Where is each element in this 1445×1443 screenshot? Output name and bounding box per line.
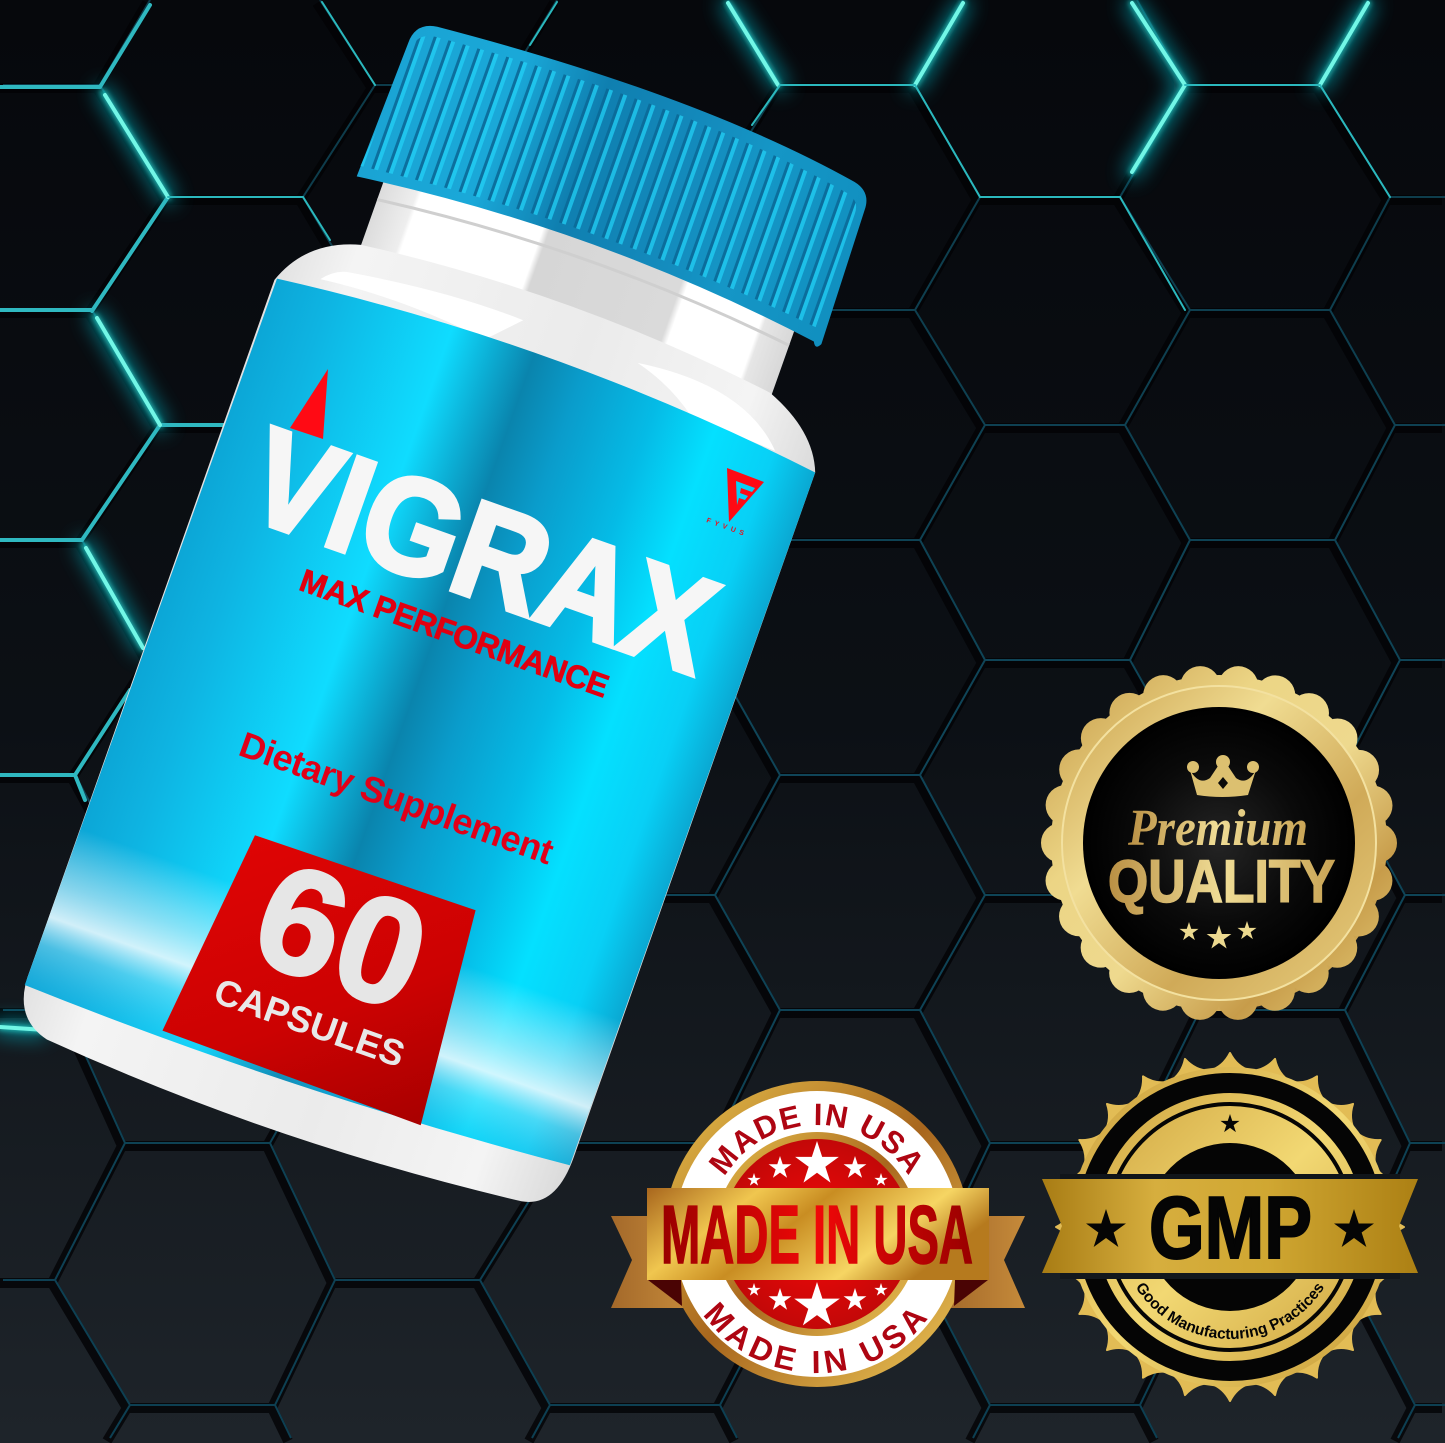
- icon: top star: [1220, 1114, 1240, 1132]
- red 60 capsules box: 60: [235, 829, 448, 1043]
- badge: GMP good manufacturing practices: [1042, 1052, 1418, 1402]
- icon: crown: [1187, 755, 1259, 797]
- ribbon folds: [648, 1280, 988, 1306]
- product bottle, rotated: [24, 26, 866, 1202]
- main ribbon: [647, 1188, 989, 1280]
- three stars: [1179, 921, 1257, 949]
- ribbon tails: [611, 1216, 1025, 1308]
- white stars: [747, 1141, 888, 1325]
- red 60 capsules box: CAPSULES: [209, 970, 410, 1075]
- glowing cyan hexagon edges: [0, 2, 1390, 1030]
- FYVUS brand logo: [705, 468, 764, 539]
- GMP text: GMP: [1149, 1178, 1312, 1277]
- curved text bottom: MADE IN USA: [704, 1302, 928, 1374]
- blue product label: [23, 263, 822, 1180]
- Good Manufacturing Practices arc text: Good Manufacturing Practices: [1137, 1283, 1324, 1340]
- ribbon banner: [1042, 1179, 1418, 1273]
- red 60 capsules box: [161, 811, 499, 1125]
- ribbon stars: [1086, 1209, 1374, 1247]
- MADE IN USA banner text: MADE IN USA: [661, 1188, 973, 1281]
- bottle white body and shoulder: [7, 210, 841, 1228]
- red triangle accent on logo: [290, 369, 328, 439]
- QUALITY text: QUALITY: [1108, 848, 1335, 915]
- brand name VIGRAX: VIGRAX: [230, 399, 735, 703]
- Dietary Supplement text: Dietary Supplement: [234, 723, 559, 872]
- FYVUS brand logo: FYVUS: [705, 517, 748, 539]
- badge: made in USA: [611, 1081, 1025, 1387]
- bottle cap with ribs: [356, 26, 866, 347]
- tagline MAX PERFORMANCE: MAX PERFORMANCE: [295, 562, 614, 704]
- curved text top: MADE IN USA: [708, 1104, 921, 1175]
- badge: premium quality: [1051, 675, 1387, 1011]
- Premium script text: Premium: [1127, 800, 1308, 857]
- bottle neck: [356, 168, 800, 404]
